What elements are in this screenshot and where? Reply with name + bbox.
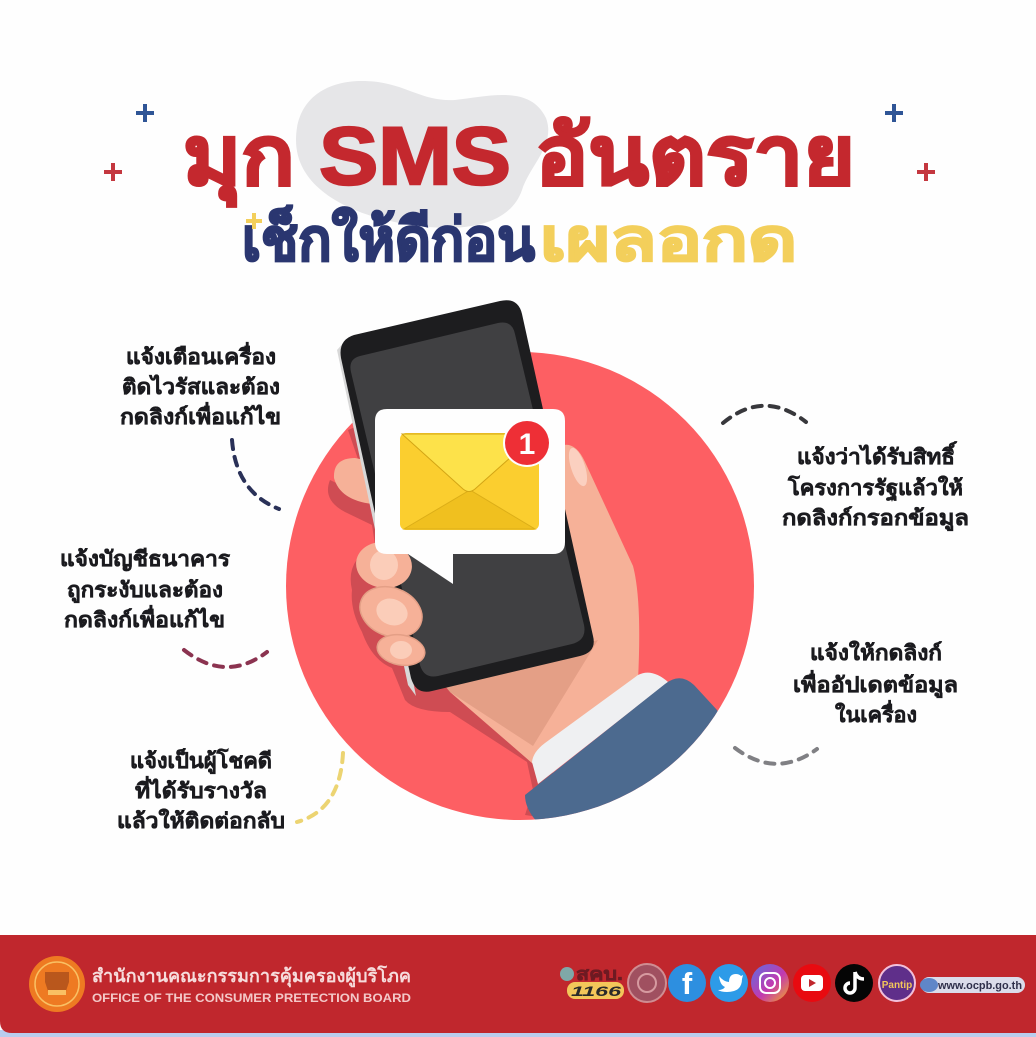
red band (0, 935, 1036, 1033)
bubble body (375, 409, 565, 584)
callout: virus warning: แจ้งเตือนเครื่อง (126, 341, 276, 369)
callout: virus warning (120, 341, 281, 429)
finger one (353, 538, 415, 592)
callout: government rights: แจ้งว่าได้รับสิทธิ์ (797, 441, 957, 469)
bottom strip (0, 1030, 1036, 1037)
palm and thumb (440, 445, 639, 770)
callout: update data: เพื่ออัปเดตข้อมูล (793, 669, 958, 699)
callout: lucky winner: แจ้งเป็นผู้โชคดี (130, 747, 272, 775)
icon: pantip: Pantip (882, 980, 912, 991)
jacket sleeve (525, 678, 718, 820)
dashed line: yellow (297, 753, 343, 822)
icon: OCPB seal (29, 956, 85, 1012)
envelope back (400, 433, 539, 530)
icon: twitter (710, 964, 748, 1002)
callout: government rights: โครงการรัฐแล้วให้ (787, 475, 963, 502)
thumb nail (565, 446, 591, 488)
dashed line: maroon (184, 650, 267, 667)
website pill (920, 977, 1025, 993)
palm shadow under phone (440, 640, 598, 746)
organisation name Thai: สำนักงานคณะกรรมการคุ้มครองผู้บริโภค (92, 965, 411, 988)
dashed line: dark (723, 406, 806, 423)
icon: OCPB circle (628, 964, 666, 1002)
decorative plus signs (104, 104, 935, 229)
callout: virus warning: กดลิงก์เพื่อแก้ไข (120, 401, 281, 429)
organisation name English: OFFICE OF THE CONSUMER PRETECTION BOARD (92, 993, 411, 1005)
dashed line: navy (232, 440, 279, 509)
heading line 1: มุก SMS อันตราย (183, 111, 855, 207)
callout: lucky winner (117, 747, 285, 833)
callout: update data (793, 640, 958, 727)
callout: update data: แจ้งให้กดลิงก์ (810, 640, 942, 665)
heading line 2 blue: เช็กให้ดีก่อน (242, 205, 535, 273)
dashed line: grey (735, 748, 817, 764)
badge number: 1 (519, 428, 535, 461)
callout: virus warning: ติดไวรัสและต้อง (122, 374, 280, 399)
callout: government rights (782, 441, 969, 532)
red circle (286, 352, 754, 820)
shirt cuff (532, 673, 668, 784)
illustration: hand holding phone (286, 300, 754, 860)
callout: bank account: แจ้งบัญชีธนาคาร (60, 547, 231, 572)
envelope lower flap (404, 490, 535, 529)
heading line 2 yellow: เผลอกด (540, 208, 797, 273)
icon: youtube (793, 964, 831, 1002)
hotline logo: สคบ. (576, 964, 623, 984)
callout: bank account: กดลิงก์เพื่อแก้ไข (64, 604, 225, 632)
grey blob behind SMS (296, 81, 548, 228)
phone screen (350, 322, 584, 677)
finger highlights (370, 550, 412, 659)
icon: tiktok (835, 964, 873, 1002)
website pill: www.ocpb.go.th (937, 980, 1022, 992)
back finger (334, 458, 372, 504)
envelope upper flap (402, 434, 537, 492)
callout: lucky winner: ที่ได้รับรางวัล (135, 775, 267, 803)
callout: bank account: ถูกระงับและต้อง (67, 578, 223, 604)
hotline logo (560, 964, 624, 999)
fingers (352, 538, 430, 669)
callout: bank account (60, 547, 231, 632)
icon: pantip (879, 965, 915, 1001)
finger three (375, 631, 427, 669)
icon: facebook: f (682, 966, 693, 1001)
phone side edge (337, 340, 416, 696)
hand shadow (328, 425, 560, 818)
callout: government rights: กดลิงก์กรอกข้อมูล (782, 506, 969, 532)
phone case (341, 300, 594, 692)
finger two (352, 578, 430, 646)
notification badge (503, 419, 551, 467)
callout: lucky winner: แล้วให้ติดต่อกลับ (117, 808, 285, 833)
title block (183, 81, 855, 273)
phone body (337, 300, 594, 696)
icon: instagram (751, 964, 789, 1002)
footer band (0, 935, 1036, 1037)
hotline logo: 1166 (571, 983, 621, 999)
notification speech bubble (375, 409, 565, 584)
callout: update data: ในเครื่อง (835, 699, 917, 727)
icon: facebook (668, 964, 706, 1002)
